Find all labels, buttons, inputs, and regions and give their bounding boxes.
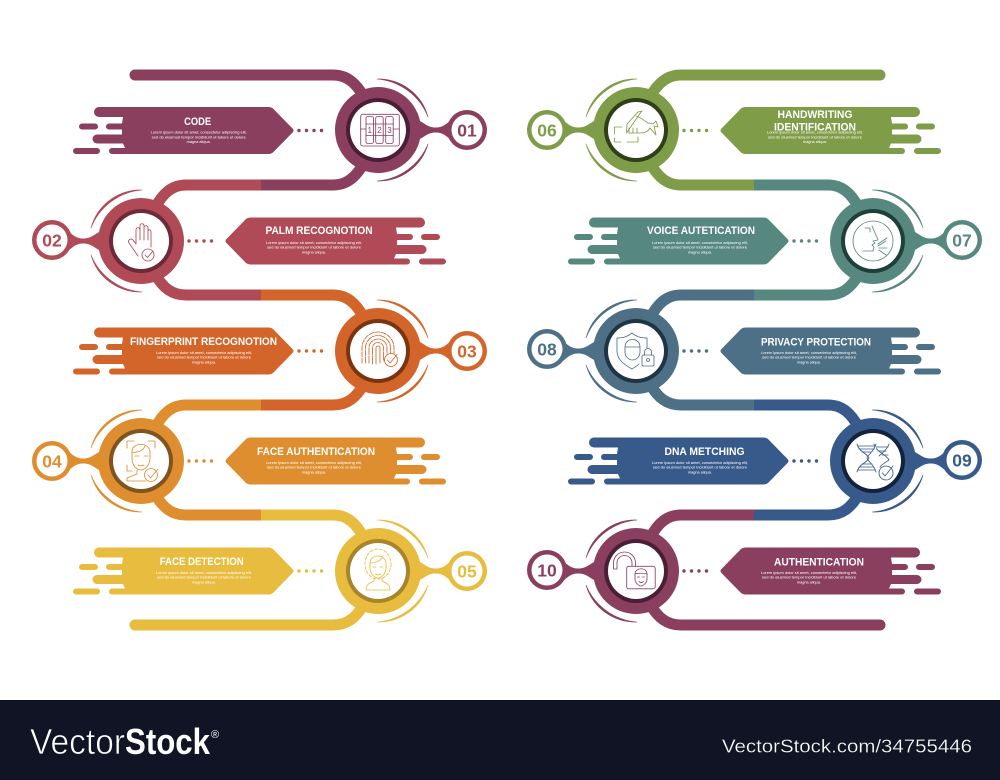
dotted connector 02 <box>189 239 219 243</box>
step 02: palm recognition <box>32 185 446 295</box>
description 09: Lorem ipsum dolor sit amet, consectetur adipiscing elit, <box>652 461 748 465</box>
description 02: magna aliqua. <box>302 250 326 254</box>
number badge 10 <box>527 550 567 590</box>
dotted connector 05 <box>299 569 329 573</box>
description 01: magna aliqua. <box>187 140 211 144</box>
description 01: Lorem ipsum dolor sit amet, consectetur adipiscing elit, <box>151 131 247 135</box>
number badge 06 <box>527 110 567 150</box>
number badge 03 <box>447 331 487 371</box>
heading: face detection: FACE DETECTION <box>160 556 244 568</box>
dotted connector 01 <box>299 129 329 132</box>
description 01 <box>151 131 247 144</box>
description 06: sed do eiusmod tempor incididunt ut labore et dolore <box>768 135 862 139</box>
description 07: Lorem ipsum dolor sit amet, consectetur adipiscing elit, <box>652 241 748 245</box>
description 06 <box>767 131 863 144</box>
heading: handwriting: HANDWRITING <box>778 109 852 121</box>
description 09: sed do eiusmod tempor incididunt ut labore et dolore <box>653 466 747 470</box>
description 07: sed do eiusmod tempor incididunt ut labore et dolore <box>653 246 747 250</box>
heading: voice: VOICE AUTETICATION <box>647 225 755 237</box>
logo wordmark: Vector <box>30 721 125 762</box>
dotted connector 10 <box>684 569 714 573</box>
dotted connector 06 <box>684 129 714 132</box>
node 02 <box>68 190 184 292</box>
node 07 <box>830 190 946 292</box>
dotted connector 08 <box>684 349 714 353</box>
heading: handwriting <box>774 109 856 134</box>
logo wordmark: ® <box>211 729 219 741</box>
track 05 end <box>135 604 364 625</box>
icon: keypad: 1 <box>367 126 372 135</box>
label: face detection <box>73 548 294 594</box>
icon: keypad: 3 <box>387 126 392 135</box>
label: code <box>73 107 294 154</box>
heading: fingerprint: FINGERPRINT RECOGNOTION <box>130 336 277 348</box>
label: dna <box>568 438 788 484</box>
label: handwriting <box>720 107 941 154</box>
icon: open lock with id card <box>614 552 655 589</box>
track 07 in <box>754 185 859 208</box>
description 07 <box>652 241 748 254</box>
description 03: magna aliqua. <box>192 360 216 364</box>
description 06: Lorem ipsum dolor sit amet, consectetur adipiscing elit, <box>767 131 863 135</box>
logo wordmark <box>30 721 219 762</box>
node 05 <box>335 520 451 622</box>
description 04: Lorem ipsum dolor sit amet, consectetur adipiscing elit, <box>266 461 362 465</box>
label: authentication <box>720 548 941 594</box>
description 03: Lorem ipsum dolor sit amet, consectetur adipiscing elit, <box>156 351 252 355</box>
icon: face detection oval <box>365 549 391 590</box>
number badge 10: 10 <box>537 560 557 580</box>
heading: privacy: PRIVACY PROTECTION <box>761 337 871 349</box>
track 07 out <box>754 274 859 295</box>
footer banner <box>0 700 1000 780</box>
description 05: magna aliqua. <box>192 580 216 584</box>
number badge 07 <box>942 220 982 260</box>
description 07: magna aliqua. <box>688 250 712 254</box>
number badge 02: 02 <box>42 230 62 250</box>
number badge 08 <box>527 329 567 369</box>
number badge 08: 08 <box>537 339 557 359</box>
step 08: privacy protection <box>527 295 941 405</box>
description 04: sed do eiusmod tempor incididunt ut labore et dolore <box>267 466 361 470</box>
description 04: magna aliqua. <box>302 470 326 474</box>
track 04 out <box>155 494 261 515</box>
number badge 01: 01 <box>457 120 477 140</box>
node 10 <box>563 520 679 622</box>
description 05: sed do eiusmod tempor incididunt ut labore et dolore <box>157 576 251 580</box>
description 03: sed do eiusmod tempor incididunt ut labore et dolore <box>157 356 251 360</box>
label: face authentication <box>226 438 446 484</box>
heading: dna: DNA METCHING <box>664 446 744 458</box>
description 05: Lorem ipsum dolor sit amet, consectetur adipiscing elit, <box>156 571 252 575</box>
icon: palm with check <box>128 224 154 261</box>
track 10 end <box>650 604 880 625</box>
heading: authentication: AUTHENTICATION <box>774 557 864 569</box>
description 08 <box>761 351 857 364</box>
description 08: Lorem ipsum dolor sit amet, consectetur adipiscing elit, <box>761 351 857 355</box>
node 01 <box>335 79 451 181</box>
description 01: sed do eiusmod tempor incididunt ut labore et dolore <box>152 135 246 139</box>
number badge 07: 07 <box>952 230 972 250</box>
node 04 <box>68 410 184 512</box>
number badge 03: 03 <box>457 341 477 361</box>
track 02 in <box>155 185 261 208</box>
label: fingerprint <box>73 328 294 374</box>
description 03 <box>156 351 252 364</box>
number badge 01 <box>447 110 487 150</box>
step 03: fingerprint <box>73 295 487 405</box>
icon: shield with lock <box>617 333 654 369</box>
track 06 out <box>650 163 754 185</box>
number badge 02 <box>32 220 72 260</box>
logo wordmark: Stock <box>125 721 211 762</box>
heading: palm: PALM RECOGNOTION <box>266 225 373 237</box>
step 04: face authentication <box>32 405 446 515</box>
step 01: code <box>73 75 487 185</box>
track 06 start <box>650 75 880 97</box>
description 08: sed do eiusmod tempor incididunt ut labore et dolore <box>762 356 856 360</box>
track 08 in <box>650 295 754 318</box>
track 08 out <box>650 384 754 405</box>
description 02: sed do eiusmod tempor incididunt ut labore et dolore <box>267 246 361 250</box>
step 09: dna matching <box>568 405 982 515</box>
description 09 <box>652 461 748 474</box>
description 10: magna aliqua. <box>797 580 821 584</box>
step 10: authentication <box>527 515 941 625</box>
track 01 <box>135 75 364 97</box>
number badge 05: 05 <box>457 561 477 581</box>
label: voice <box>568 218 788 264</box>
track 09 out <box>754 494 859 515</box>
node 06 <box>563 79 679 181</box>
description 02 <box>266 241 362 254</box>
step 07: voice authentication <box>568 185 982 295</box>
track 02 out <box>155 274 261 295</box>
dotted connector 03 <box>299 349 329 353</box>
icon: handwriting <box>614 111 658 142</box>
label: palm <box>226 218 446 264</box>
node 08 <box>563 300 679 402</box>
description 10: Lorem ipsum dolor sit amet, consectetur adipiscing elit, <box>761 571 857 575</box>
dotted connector 09 <box>794 459 824 463</box>
image id: VectorStock.com/34755446 <box>722 736 972 757</box>
track 09 in <box>754 405 859 428</box>
icon: speaking head <box>853 221 893 261</box>
number badge 06: 06 <box>537 120 557 140</box>
number badge 05 <box>447 551 487 591</box>
description 02: Lorem ipsum dolor sit amet, consectetur adipiscing elit, <box>266 241 362 245</box>
track 01 to 02 <box>261 163 364 185</box>
description 09: magna aliqua. <box>688 470 712 474</box>
track 03 in <box>261 295 364 318</box>
icon: fingerprint with check <box>362 332 398 366</box>
icon: keypad: 2 <box>377 126 382 135</box>
heading: face authentication: FACE AUTHENTICATION <box>257 446 375 458</box>
number badge 09 <box>942 440 982 480</box>
step 06: handwriting identification <box>527 75 941 185</box>
number badge 04: 04 <box>42 451 62 471</box>
track 10 in <box>650 515 754 538</box>
track 03 out <box>261 384 364 405</box>
number badge 09: 09 <box>952 450 972 470</box>
heading: handwriting: IDENTIFICATION <box>774 122 856 134</box>
dotted connector 07 <box>794 239 824 243</box>
node 09 <box>830 410 946 512</box>
step 05: face detection <box>73 515 487 625</box>
description 04 <box>266 461 362 474</box>
icon: face scan with check <box>127 441 158 482</box>
track 04 in <box>155 405 261 428</box>
dotted connector 04 <box>189 459 219 463</box>
description 10 <box>761 571 857 584</box>
icon: keypad <box>361 114 399 146</box>
description 10: sed do eiusmod tempor incididunt ut labore et dolore <box>762 576 856 580</box>
number badge 04 <box>32 441 72 481</box>
node 03 <box>335 300 451 402</box>
track 05 in <box>261 515 364 538</box>
description 05 <box>156 571 252 584</box>
heading: code: CODE <box>184 116 211 128</box>
icon: dna with check <box>857 444 893 480</box>
label: privacy <box>720 328 941 374</box>
description 06: magna aliqua. <box>803 140 827 144</box>
description 08: magna aliqua. <box>797 360 821 364</box>
